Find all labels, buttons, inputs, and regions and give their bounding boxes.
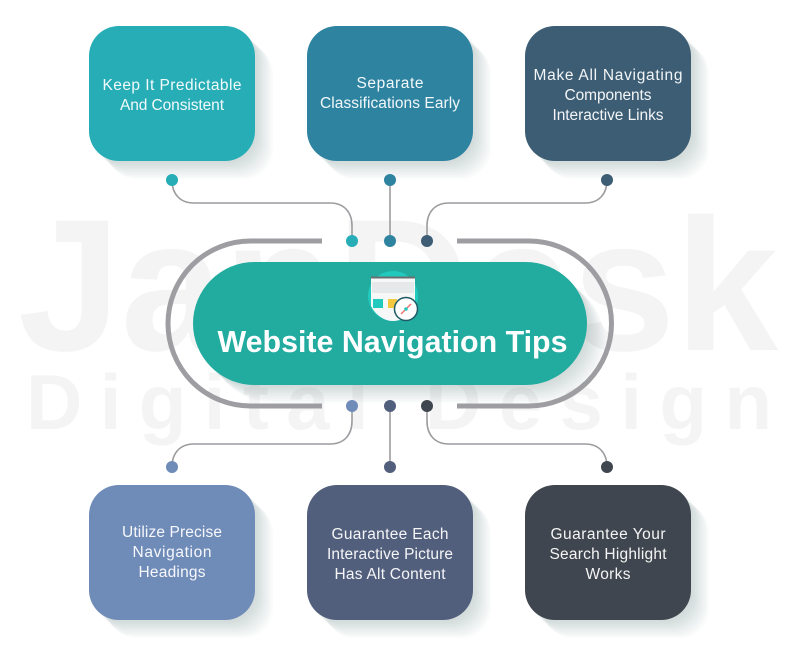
card: navigation headings: Headings	[138, 564, 206, 581]
central pill shadow	[195, 264, 605, 403]
card: separate classifications: Separate	[356, 75, 424, 92]
card shadows	[91, 28, 709, 638]
card: interactive links: Make All Navigating	[534, 67, 682, 84]
card: keep it predictable: Keep It Predictable	[102, 77, 242, 94]
card: alt content: Guarantee Each	[332, 526, 448, 543]
connector dots	[166, 174, 613, 473]
card: navigation headings: Navigation	[132, 544, 212, 561]
card: separate classifications: Classifications Early	[320, 95, 460, 112]
icon: browser with compass	[368, 271, 418, 321]
card: navigation headings	[89, 485, 255, 620]
outer ring	[168, 241, 611, 406]
connector lines	[172, 180, 607, 467]
card: keep it predictable: And Consistent	[120, 97, 225, 114]
card: alt content	[307, 485, 473, 620]
card: separate classifications	[307, 26, 473, 161]
card: search highlight: Guarantee Your	[550, 526, 666, 543]
watermark: Digital Design	[26, 358, 772, 446]
card: search highlight	[525, 485, 691, 620]
central pill	[193, 262, 587, 385]
card: keep it predictable	[89, 26, 255, 161]
card: search highlight: Works	[586, 566, 631, 583]
title: Website Navigation Tips	[218, 324, 568, 359]
card: search highlight: Search Highlight	[550, 546, 667, 563]
card: navigation headings: Utilize Precise	[122, 524, 222, 541]
card: interactive links	[525, 26, 691, 161]
card: interactive links: Interactive Links	[552, 107, 664, 124]
card: alt content: Interactive Picture	[327, 546, 453, 563]
watermark: JanDesk	[18, 180, 778, 390]
card: interactive links: Components	[564, 87, 652, 104]
card: alt content: Has Alt Content	[334, 566, 446, 583]
